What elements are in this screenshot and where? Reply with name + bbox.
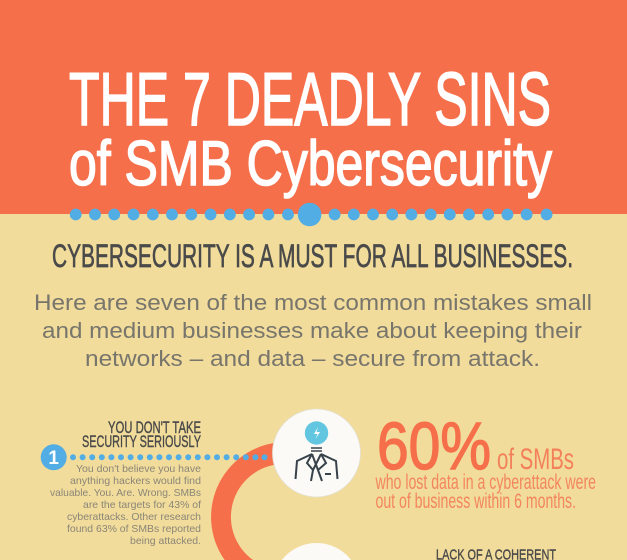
sin 1 body text [50,463,201,547]
sin 1 heading: SECURITY SERIOUSLY [82,433,201,451]
intro paragraph: and medium businesses make about keeping their [42,318,582,343]
intro paragraph: Here are seven of the most common mistakes small [34,290,592,315]
intro paragraph [34,290,592,371]
sin 1 body text: anything hackers would find [70,475,201,487]
stat: 60 percent: 60% [377,409,491,484]
sin 1 body text: valuable. You. Are. Wrong. SMBs [50,487,201,499]
header banner [0,0,627,214]
sin 1 heading [82,419,201,451]
dotted connector [70,454,268,460]
connector ring [211,442,300,560]
stat: 60 percent [375,409,596,513]
sin 1 body text: found 63% of SMBs reported [67,523,201,535]
title [69,57,552,199]
sin 1 body text: are the targets for 43% of [83,499,201,511]
sin 1 body text: cyberattacks. Other research [67,511,201,523]
stat: 60 percent: of SMBs [497,443,574,476]
intro paragraph: networks – and data – secure from attack. [85,346,540,371]
number badge 1: 1 [48,448,59,469]
icon circle 2 [282,543,351,560]
sin 1 body text: You don't believe you have [76,463,201,475]
number badge 1 [41,444,67,470]
dotted divider [70,203,552,226]
icon circle 1: lightbulb businessman [272,409,360,497]
sin 1 heading: YOU DON'T TAKE [108,419,201,437]
sin 1 body text: being attacked. [130,535,201,547]
